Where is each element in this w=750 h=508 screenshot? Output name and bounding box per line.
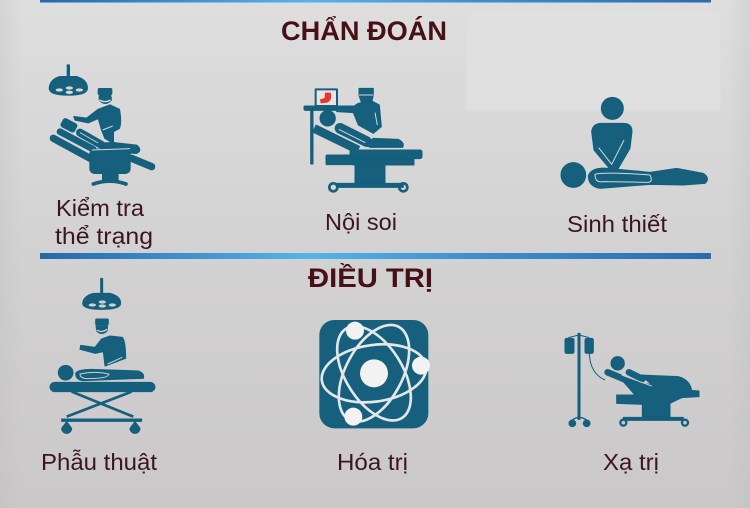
icon: surgery bbox=[50, 278, 155, 433]
middle divider bar bbox=[40, 253, 711, 259]
label: Sinh thiết: Sinh thiết bbox=[567, 211, 667, 237]
heading: ĐIỀU TRỊ: ĐIỀU TRỊ bbox=[308, 262, 433, 293]
label: Kiểm tra thể trạng bbox=[55, 195, 153, 249]
top divider bar bbox=[40, 0, 711, 2]
icon: chemotherapy atom bbox=[318, 314, 430, 433]
label: Hóa trị: Hóa trị bbox=[337, 449, 408, 475]
icon: radiotherapy bbox=[565, 333, 699, 427]
label: Kiểm tra thể trạng: thể trạng bbox=[55, 223, 153, 249]
label: Nội soi: Nội soi bbox=[325, 209, 397, 235]
icon: endoscopy bbox=[304, 88, 422, 191]
icon: physical examination bbox=[49, 65, 152, 184]
icon: biopsy bbox=[561, 97, 707, 188]
label: Kiểm tra thể trạng: Kiểm tra bbox=[56, 195, 145, 221]
heading: CHẨN ĐOÁN: CHẨN ĐOÁN bbox=[281, 15, 447, 46]
label: Xạ trị: Xạ trị bbox=[603, 449, 659, 475]
label: Phẫu thuật: Phẫu thuật bbox=[41, 449, 157, 475]
